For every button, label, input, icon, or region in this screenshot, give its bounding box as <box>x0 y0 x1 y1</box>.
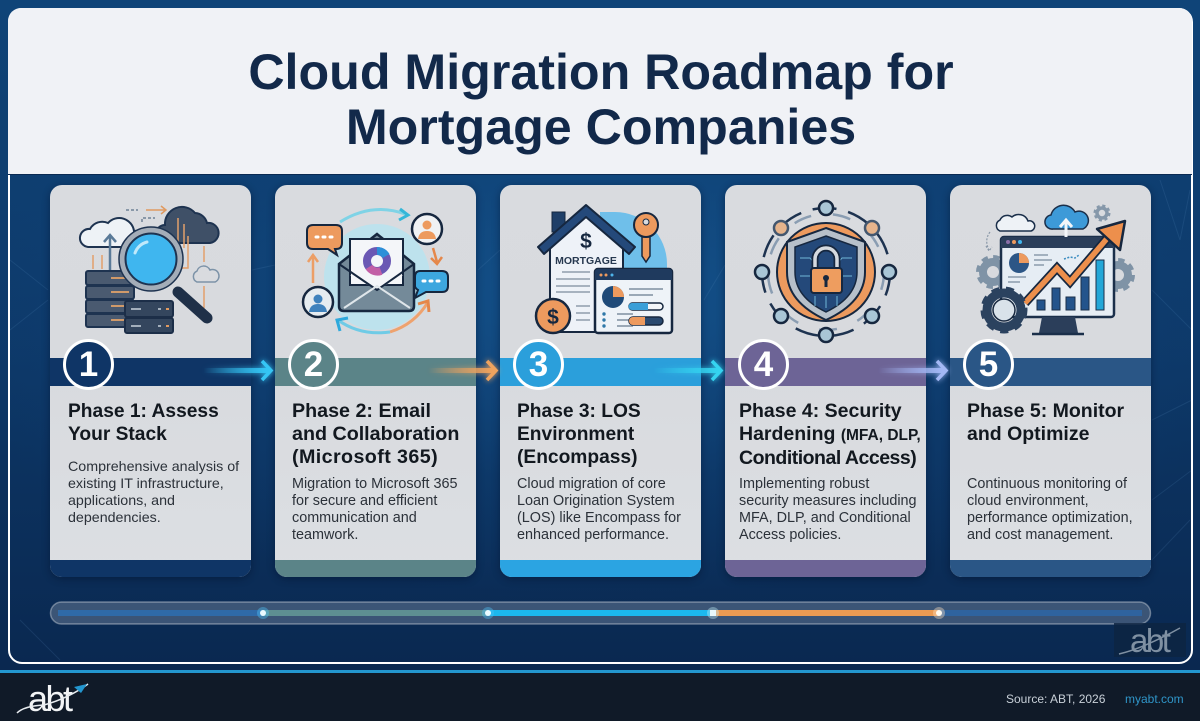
badge: number 2: 2 <box>304 345 323 384</box>
icon: mortgage house, key and dashboard <box>534 204 674 334</box>
footer <box>0 670 1200 721</box>
phase 4 description: security measures including <box>739 493 917 509</box>
phase 5 heading: Phase 5: Monitor <box>967 400 1124 422</box>
phase 3 description: (LOS) like Encompass for <box>517 510 681 526</box>
badge: number 3: 3 <box>529 345 548 384</box>
band: phase 3 <box>500 358 701 386</box>
phase 4 heading <box>739 400 921 469</box>
phase 5 heading <box>967 400 1124 445</box>
phase 5 description: and cost management. <box>967 527 1113 543</box>
dollar coin: $ <box>547 306 559 329</box>
phase 3 description: Cloud migration of core <box>517 476 666 492</box>
title: Mortgage Companies <box>346 99 856 155</box>
icon: monitor with growth arrow and gears <box>976 204 1135 336</box>
phase 2 heading: and Collaboration <box>292 423 459 445</box>
badge: number 5: 5 <box>979 345 998 384</box>
phase 4 heading: Conditional Access) <box>739 447 916 469</box>
icon: servers, clouds and magnifier <box>78 206 220 334</box>
phase 5 heading: and Optimize <box>967 423 1089 445</box>
arrow: phase 4 to 5 <box>878 361 946 380</box>
strip: phase 1 <box>50 560 251 577</box>
phase 1 description <box>68 459 240 526</box>
panel: phase 5 <box>950 185 1151 577</box>
progress timeline bar <box>50 601 1152 625</box>
badge: number 4: 4 <box>754 345 773 384</box>
phase 3 heading <box>517 401 641 468</box>
panel: phase 4 <box>725 185 926 577</box>
mortgage label: MORTGAGE <box>555 255 617 267</box>
phase 5 description <box>967 476 1133 543</box>
phase 4 heading: Hardening (MFA, DLP, <box>739 423 921 445</box>
badge: number 3 <box>513 339 564 390</box>
band: phase 2 <box>275 358 476 386</box>
title <box>248 44 954 155</box>
phase 4 description: Implementing robust <box>739 476 869 492</box>
badge: number 4 <box>738 339 789 390</box>
icon: email with collaboration <box>302 208 449 334</box>
arrow: phase 2 to 3 <box>428 361 496 380</box>
phase 3 description: enhanced performance. <box>517 527 669 543</box>
phase 2 description <box>292 476 458 543</box>
phase 1 heading <box>68 401 219 445</box>
icon: security shield with padlock <box>754 200 898 344</box>
phase 1 description: Comprehensive analysis of <box>68 459 239 475</box>
title panel <box>8 8 1192 175</box>
footer logo <box>16 680 88 716</box>
phase 3 heading: Phase 3: LOS <box>517 401 641 422</box>
badge: number 1 <box>63 339 114 390</box>
badge: number 5 <box>963 339 1014 390</box>
strip: phase 3 <box>500 560 701 577</box>
band: phase 5 <box>950 358 1151 386</box>
panel: phase 2 <box>275 185 476 577</box>
arrows between phases <box>206 356 951 384</box>
dollar sign on house: $ <box>580 230 592 253</box>
band: phase 4 <box>725 358 926 386</box>
phase 1 description: existing IT infrastructure, <box>68 476 224 492</box>
strip: phase 4 <box>725 560 926 577</box>
phase 1 heading: Your Stack <box>68 424 167 445</box>
arrow: phase 3 to 4 <box>653 361 721 380</box>
panel: phase 1 <box>50 185 251 577</box>
phase 5 description: performance optimization, <box>967 510 1133 526</box>
phase 1 description: dependencies. <box>68 510 161 526</box>
phase 3 description <box>517 476 681 543</box>
phase 4 description: MFA, DLP, and Conditional <box>739 510 911 526</box>
phase 2 description: Migration to Microsoft 365 <box>292 476 458 492</box>
strip: phase 2 <box>275 560 476 577</box>
strip: phase 5 <box>950 560 1151 577</box>
phase 2 description: communication and <box>292 510 417 526</box>
arrow: phase 1 to 2 <box>203 361 271 380</box>
source note: Source: ABT, 2026 <box>1006 692 1105 706</box>
phase 4 description <box>739 476 917 543</box>
phase 1 heading: Phase 1: Assess <box>68 401 219 422</box>
phase 4 heading: Phase 4: Security <box>739 400 902 422</box>
phase 4 description: Access policies. <box>739 527 841 543</box>
panel: phase 3 <box>500 185 701 577</box>
phase 3 heading: Environment <box>517 424 634 445</box>
watermark logo <box>1114 623 1186 657</box>
phase 2 heading <box>292 400 459 468</box>
website: myabt.com <box>1125 692 1184 706</box>
phase 2 description: for secure and efficient <box>292 493 437 509</box>
phase 5 description: cloud environment, <box>967 493 1089 509</box>
phase 2 description: teamwork. <box>292 527 358 543</box>
badge: number 2 <box>288 339 339 390</box>
phase 3 description: Loan Origination System <box>517 493 675 509</box>
title: Cloud Migration Roadmap for <box>248 44 954 100</box>
phase 1 description: applications, and <box>68 493 175 509</box>
band: phase 1 <box>50 358 251 386</box>
badge: number 1: 1 <box>79 345 98 384</box>
phase 3 heading: (Encompass) <box>517 447 637 468</box>
phase 5 description: Continuous monitoring of <box>967 476 1127 492</box>
phase 2 heading: Phase 2: Email <box>292 400 431 422</box>
phase 2 heading: (Microsoft 365) <box>292 446 438 468</box>
